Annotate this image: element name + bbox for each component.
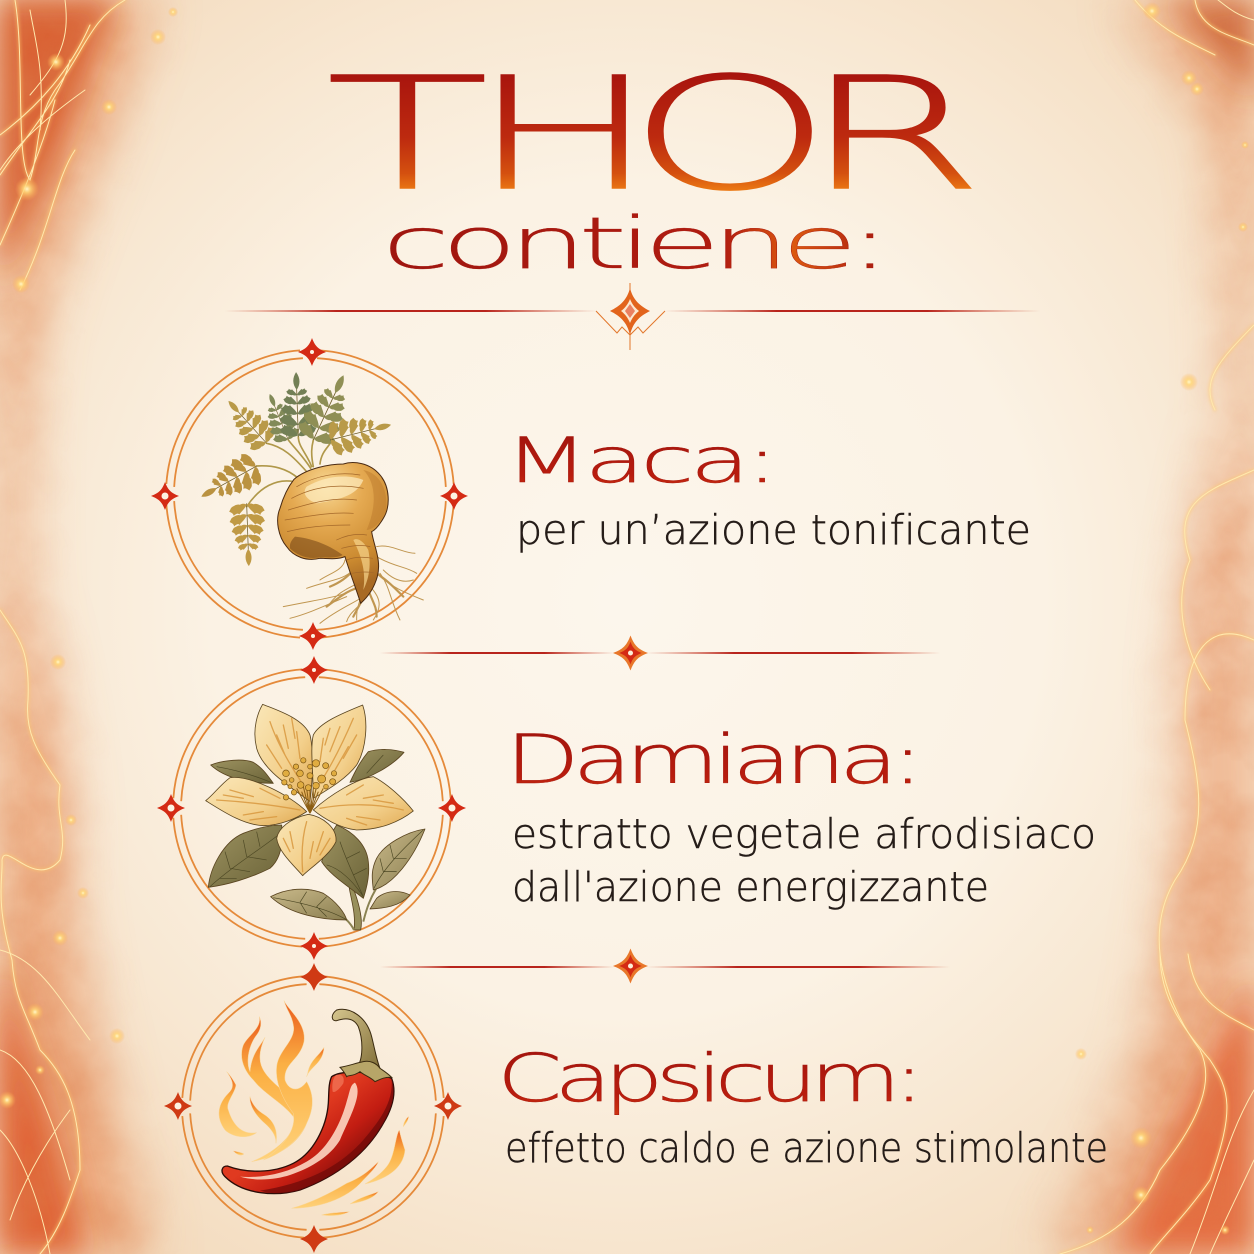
title: THOR: T xyxy=(326,45,489,225)
icon: chili pepper with flames xyxy=(219,1001,409,1216)
text: Damiana description: estratto vegetale afrodisiaco xyxy=(512,810,1096,858)
text: Damiana description: dall'azione energizzante xyxy=(512,863,989,911)
ingredient panel: Capsicum xyxy=(164,963,462,1253)
icon: medallion ring xyxy=(164,963,462,1253)
ingredient panel: Maca xyxy=(151,338,468,650)
top ornamental divider xyxy=(225,283,1040,350)
title: THOR: H xyxy=(472,45,655,225)
text: Capsicum description: effetto caldo e azione stimolante xyxy=(505,1124,1108,1172)
text: Capsicum heading: Capsicum: xyxy=(497,1040,917,1117)
divider 1 xyxy=(380,636,940,670)
icon: damiana flower illustration xyxy=(206,704,425,930)
ingredient panel: Damiana xyxy=(157,656,466,960)
title: THOR: O xyxy=(628,45,832,225)
divider 2 xyxy=(380,948,950,984)
text: Damiana heading: Damiana: xyxy=(505,721,917,800)
icon: medallion ring xyxy=(157,656,466,960)
icon: maca root illustration xyxy=(193,367,423,623)
icon: medallion ring xyxy=(151,338,468,650)
subtitle: contiene: contiene: xyxy=(382,202,882,285)
title: THOR xyxy=(326,44,984,225)
title: THOR: R xyxy=(803,44,984,225)
text: Maca description: per un’azione tonificante xyxy=(516,506,1031,554)
text: Maca heading: Maca: xyxy=(504,424,774,497)
text: Damiana description xyxy=(512,810,1096,911)
